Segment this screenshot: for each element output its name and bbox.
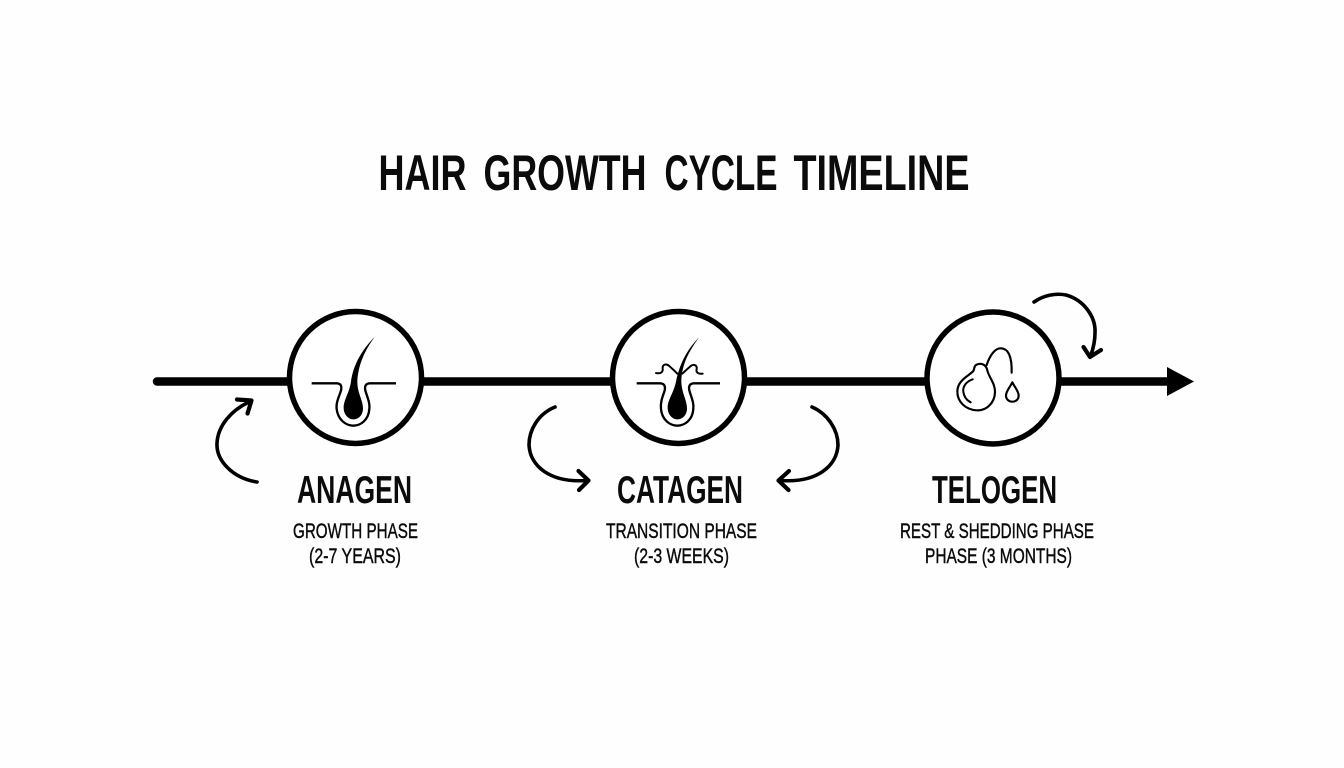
title: TIMELINE [794, 145, 970, 201]
arrow: catagen right curved arrow [778, 407, 838, 490]
icon: anagen hair follicle [290, 312, 422, 444]
label: catagen [606, 469, 757, 568]
panel: catagen [529, 312, 838, 568]
title: GROWTH [484, 145, 646, 201]
title [378, 145, 970, 201]
label: telogen: REST & SHEDDING PHASE [900, 519, 1094, 543]
title: HAIR [378, 145, 466, 201]
icon: catagen hair follicle [612, 312, 744, 444]
arrow: telogen curved arrow [1034, 294, 1101, 357]
timeline arrow [157, 367, 1194, 396]
label: catagen: CATAGEN [617, 469, 743, 512]
arrow: anagen curved arrow [217, 400, 257, 482]
arrow: catagen left curved arrow [529, 407, 588, 490]
panel: telogen [900, 294, 1101, 568]
label: anagen: GROWTH PHASE [293, 519, 418, 543]
label: anagen: (2-7 YEARS) [309, 544, 401, 568]
title: CYCLE [664, 145, 778, 201]
label: catagen: TRANSITION PHASE [606, 519, 757, 543]
label: telogen [900, 469, 1094, 568]
label: telogen: PHASE (3 MONTHS) [925, 544, 1072, 568]
label: telogen: TELOGEN [932, 469, 1057, 512]
label: anagen [293, 469, 418, 568]
label: catagen: (2-3 WEEKS) [634, 544, 729, 568]
panel: anagen [217, 312, 422, 568]
icon: telogen shed hair bulb and droplet [927, 312, 1059, 444]
label: anagen: ANAGEN [297, 469, 412, 512]
